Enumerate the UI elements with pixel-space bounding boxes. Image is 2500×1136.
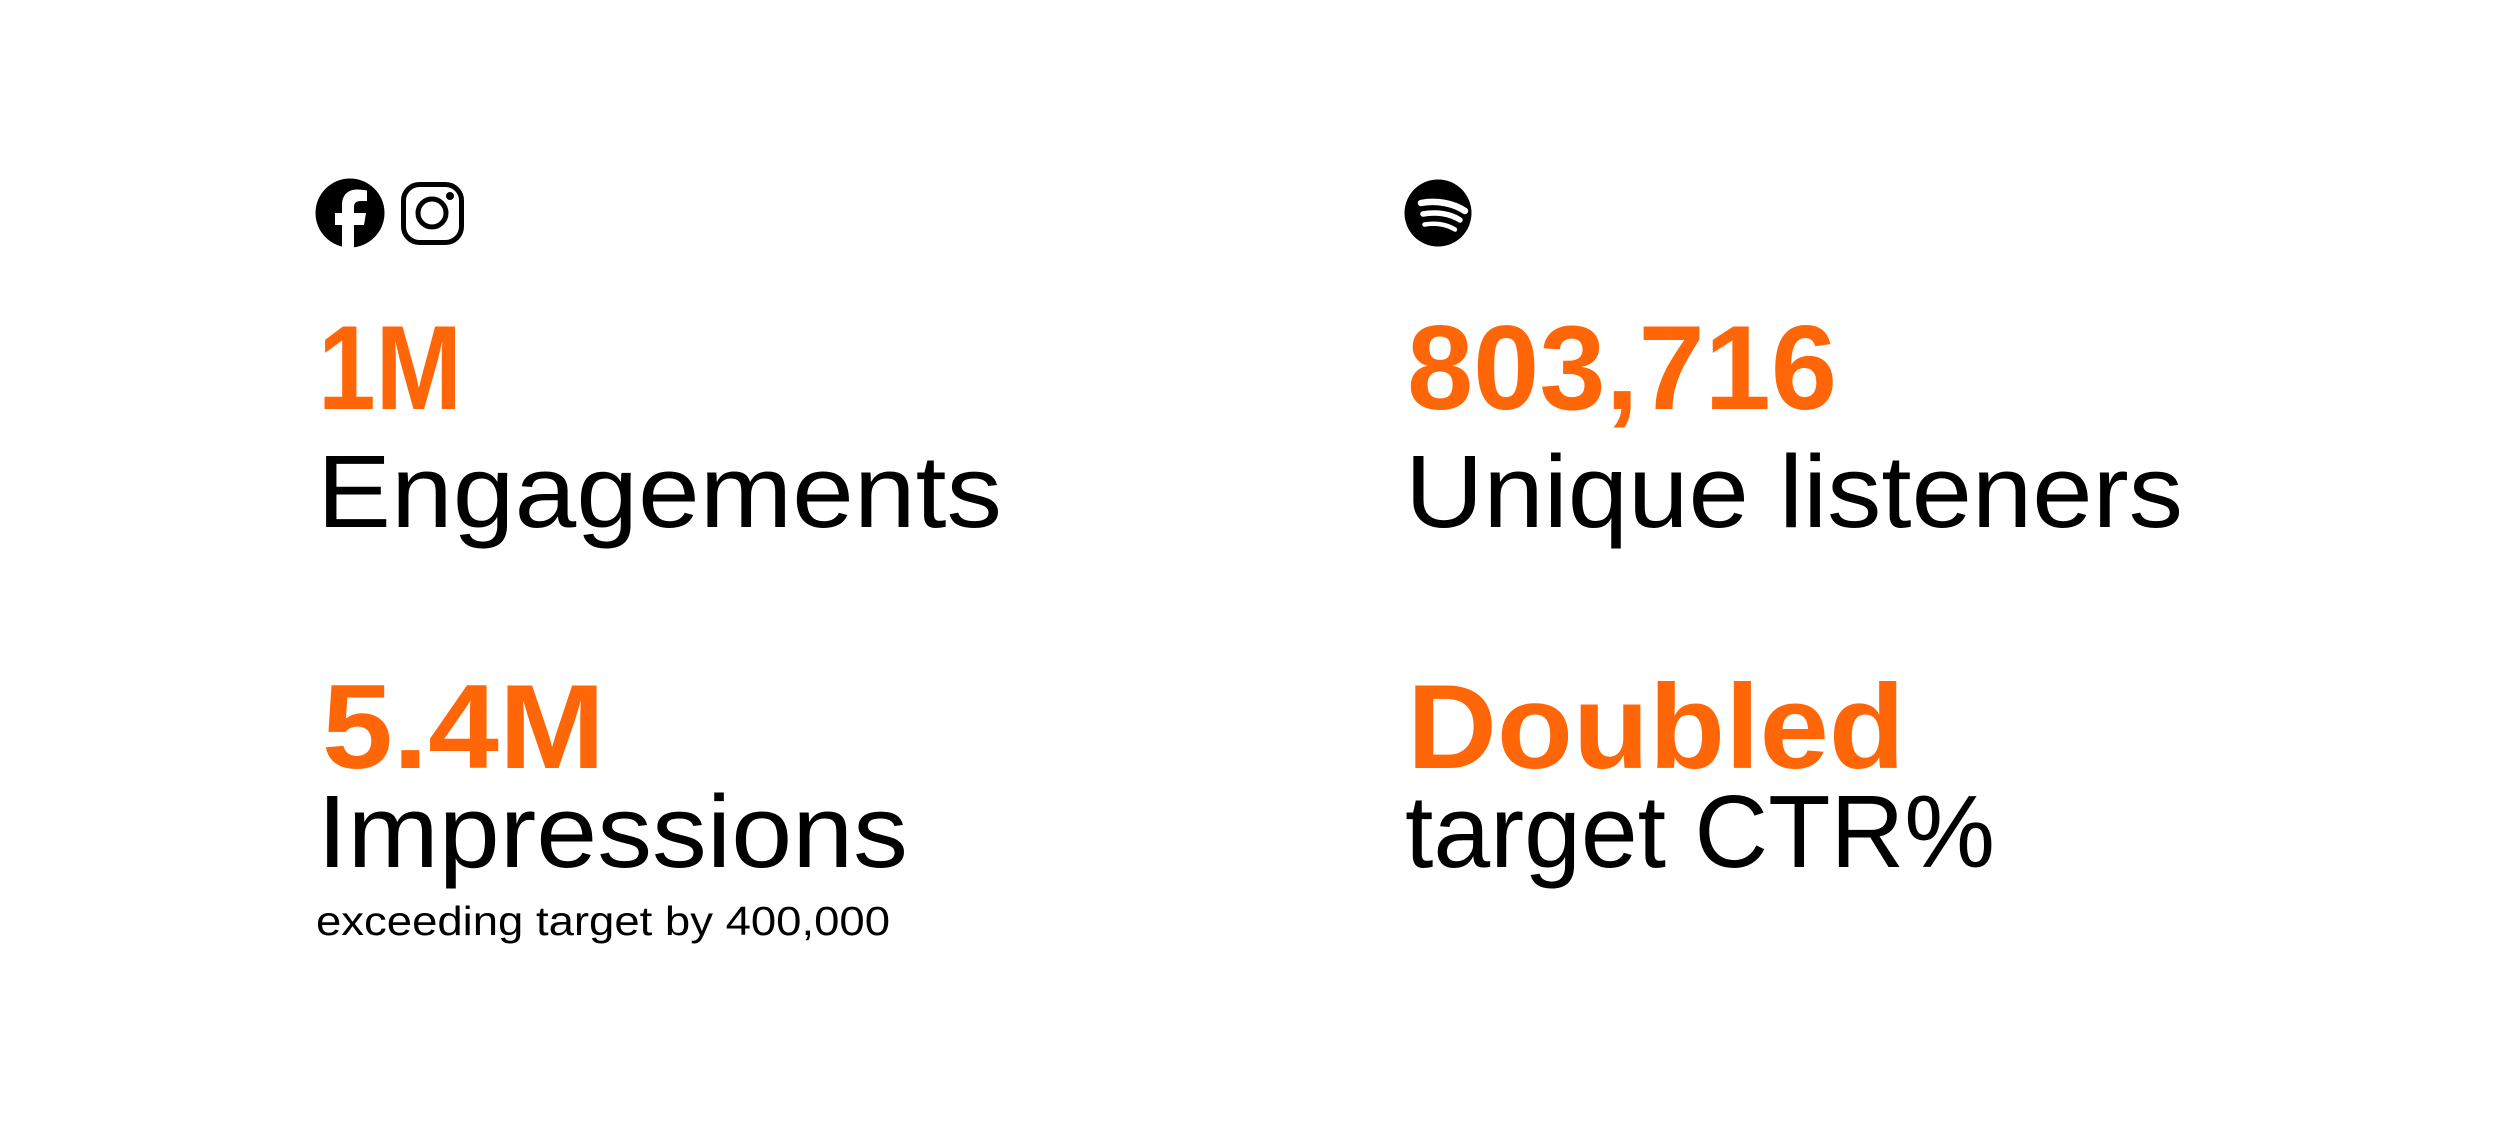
label: Unique listeners: Unique listeners xyxy=(1405,434,2183,549)
metric: Doubled: Doubled xyxy=(1407,660,1905,794)
note: exceeding target: exceeding target by 400,000 xyxy=(316,898,890,944)
metric: 5.4M: 5.4M xyxy=(322,660,605,794)
label: Engagements: Engagements xyxy=(317,434,1002,549)
panel: Spotify metrics xyxy=(1404,180,2183,889)
metric: 803,716: 803,716 xyxy=(1407,301,1837,435)
panel: Facebook and Instagram metrics xyxy=(316,178,1002,944)
icon: Instagram xyxy=(404,184,462,242)
icon: Spotify xyxy=(1404,180,1472,246)
label: target CTR%: target CTR% xyxy=(1405,774,1995,889)
label: Impressions: Impressions xyxy=(317,774,908,889)
metric: 1M: 1M xyxy=(318,301,462,435)
icon: Facebook xyxy=(316,178,384,248)
